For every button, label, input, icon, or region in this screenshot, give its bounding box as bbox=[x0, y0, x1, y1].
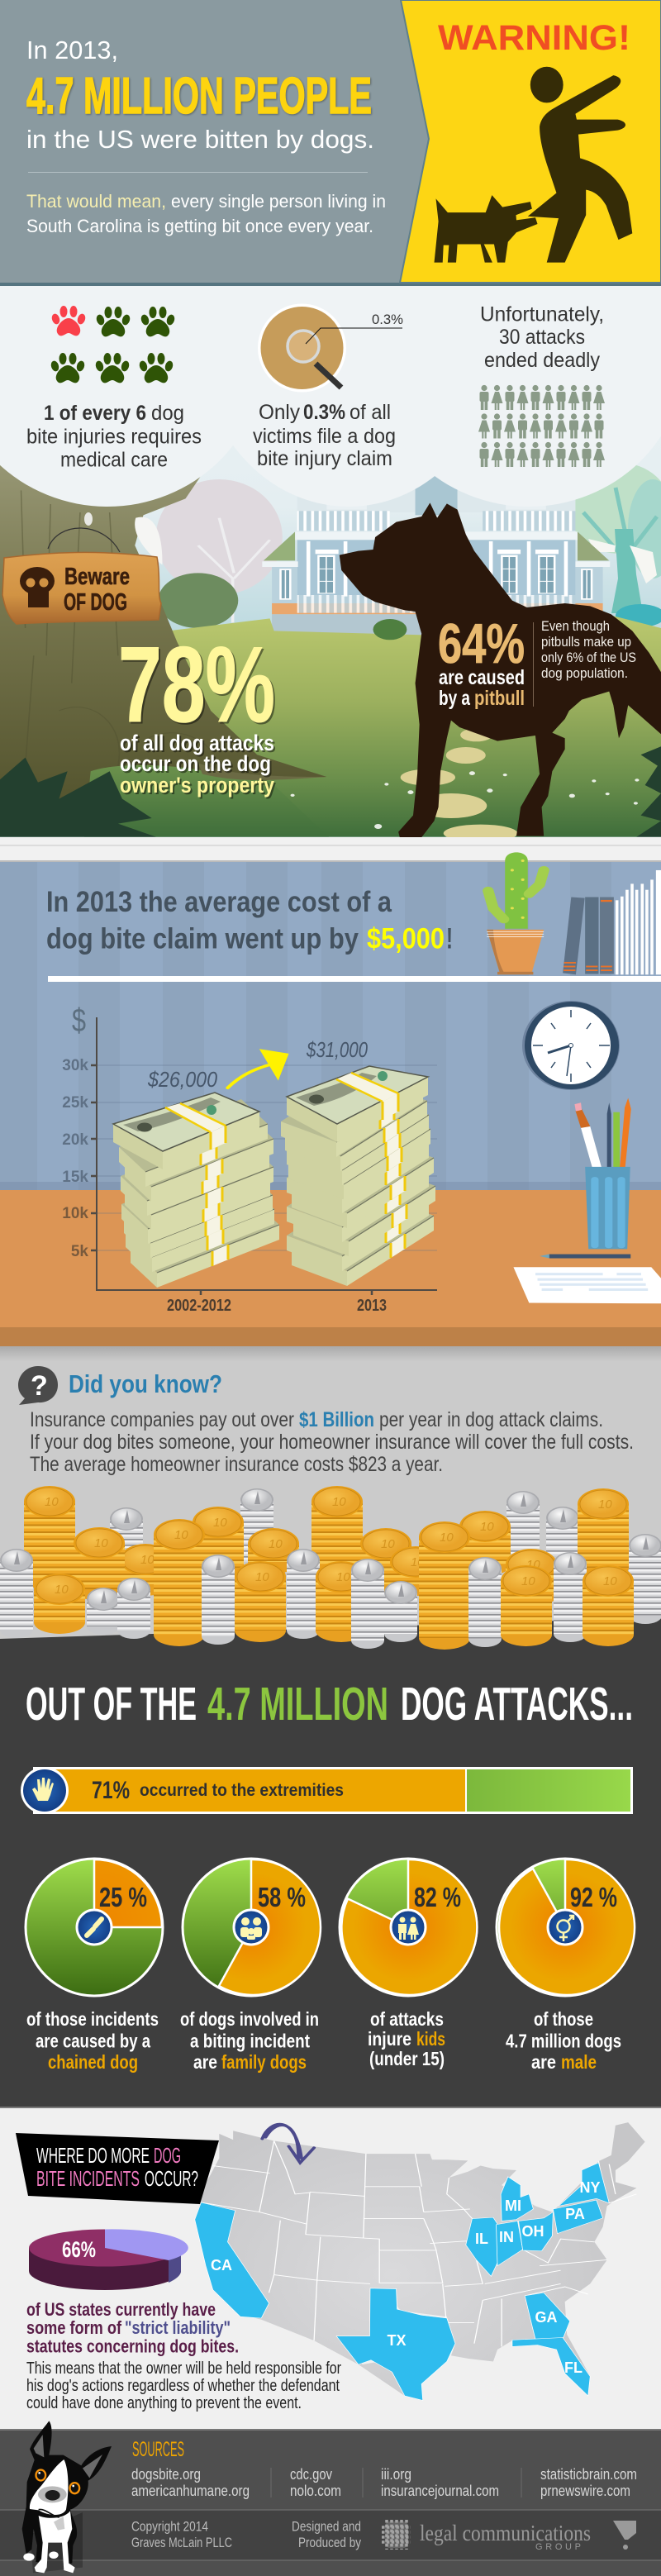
icon: coin stacks bbox=[0, 1486, 661, 1650]
map state labels: IL bbox=[475, 2231, 488, 2247]
pitbull note: Even though bbox=[541, 618, 610, 634]
magnifier caption bbox=[253, 401, 396, 470]
sources heading: SOURCES bbox=[132, 2438, 184, 2461]
pie caption: are bbox=[193, 2051, 217, 2073]
statute statement bbox=[26, 2299, 239, 2357]
stat caption: of all dog attacks bbox=[120, 731, 274, 755]
pie label: 66% bbox=[62, 2237, 96, 2262]
sources list: cdc.gov bbox=[290, 2465, 333, 2483]
statute statement: statutes concerning dog bites. bbox=[26, 2336, 239, 2357]
icon: 30 people bbox=[478, 385, 605, 467]
icon: books bbox=[563, 870, 661, 974]
claim heading: $5,000 bbox=[367, 922, 445, 955]
background trees bbox=[0, 479, 283, 628]
panel: where bites occur bbox=[0, 2108, 661, 2430]
icon: chain bbox=[87, 1919, 102, 1936]
heading line one: WHERE DO MORE bbox=[36, 2143, 150, 2168]
sources list: prnewswire.com bbox=[540, 2482, 630, 2499]
pie caption: injure bbox=[368, 2028, 411, 2050]
x axis labels: 2013 bbox=[357, 1297, 387, 1315]
statute explanation bbox=[26, 2359, 341, 2412]
foreground leaves bbox=[0, 746, 661, 837]
money stack 2002-2012 bbox=[113, 1093, 279, 1288]
pie value: 82 % bbox=[414, 1882, 461, 1912]
panel: house scene bbox=[0, 446, 661, 842]
sign text line two: OF DOG bbox=[64, 589, 127, 616]
insurance paragraph: Insurance companies pay out over bbox=[30, 1408, 294, 1431]
lawn bbox=[0, 612, 661, 842]
y axis labels: 20k bbox=[62, 1131, 88, 1149]
map state labels: NY bbox=[579, 2179, 601, 2196]
pie: kids bbox=[340, 1859, 477, 2069]
map state labels: PA bbox=[565, 2206, 585, 2222]
map of US states bbox=[195, 2122, 645, 2400]
did you know heading: Did you know? bbox=[69, 1369, 222, 1398]
magnifier caption: Only bbox=[259, 401, 300, 424]
panel: did you know bbox=[0, 1346, 661, 1654]
sources list: dogsbite.org bbox=[131, 2465, 201, 2483]
logo subtitle: GROUP bbox=[535, 2542, 581, 2552]
pitbull caption: by a bbox=[439, 687, 471, 710]
value label 31000: $31,000 bbox=[306, 1037, 368, 1062]
dollar axis label: $ bbox=[72, 1002, 86, 1039]
pie caption: male bbox=[561, 2051, 597, 2073]
y axis labels: 30k bbox=[62, 1057, 88, 1074]
map state labels: IN bbox=[499, 2229, 514, 2245]
warning title: WARNING! bbox=[438, 18, 630, 58]
y axis labels: 25k bbox=[62, 1094, 88, 1112]
dark floor bbox=[0, 1617, 661, 1654]
sign text: Beware bbox=[64, 564, 130, 590]
sources list: iii.org bbox=[381, 2465, 411, 2483]
icon: hand bbox=[32, 1778, 54, 1801]
y axis labels bbox=[62, 1057, 88, 1260]
magnifier caption: of all bbox=[350, 401, 391, 424]
stat caption bbox=[120, 731, 274, 798]
subtext bbox=[26, 191, 386, 236]
pie value: 92 % bbox=[570, 1882, 617, 1912]
pie: chained dog bbox=[26, 1859, 163, 2073]
map state labels: TX bbox=[387, 2332, 407, 2349]
y axis labels: 15k bbox=[62, 1169, 88, 1186]
map state labels: OH bbox=[522, 2223, 544, 2240]
subtext: That would mean, bbox=[26, 191, 166, 212]
pie caption bbox=[506, 2008, 621, 2073]
map heading banner bbox=[16, 2133, 219, 2204]
panel: paw stat bbox=[26, 306, 202, 471]
panel: claim cost bbox=[0, 837, 661, 1346]
pie caption: kids bbox=[416, 2028, 445, 2050]
icon: legal communications logo grid bbox=[382, 2520, 411, 2550]
headline: in 2013: In 2013, bbox=[26, 36, 118, 64]
icon: punctuation mark logo bbox=[613, 2521, 636, 2550]
insurance paragraph: per year in dog attack claims. bbox=[379, 1408, 603, 1431]
headline: 4.7 million people: 4.7 MILLION PEOPLE bbox=[26, 68, 372, 125]
headline: bitten by dogs: in the US were bitten by dogs. bbox=[26, 125, 374, 154]
icon: children bbox=[398, 1917, 419, 1940]
pie caption: family dogs bbox=[221, 2051, 307, 2073]
icon: pencil cup bbox=[540, 1098, 631, 1259]
producer credit: Produced by bbox=[298, 2535, 361, 2550]
panel: magnifier stat bbox=[253, 304, 403, 470]
icon: pitbull silhouette bbox=[340, 502, 661, 840]
insurance paragraph: The average homeowner insurance costs $823 a year. bbox=[30, 1453, 443, 1476]
statute statement: "strict liability" bbox=[125, 2317, 231, 2338]
icon: clock bbox=[522, 1001, 620, 1090]
deadly caption: ended deadly bbox=[484, 349, 600, 372]
top bill bundle bbox=[287, 1066, 428, 1142]
bar: 71 percent extremities bbox=[21, 1767, 633, 1814]
stat: 78 percent bbox=[118, 624, 275, 798]
pie caption: chained dog bbox=[48, 2051, 138, 2073]
deadly caption bbox=[480, 302, 604, 372]
paw caption: dog bbox=[151, 402, 184, 425]
pie caption bbox=[180, 2008, 319, 2073]
bar chart axes bbox=[62, 1002, 437, 1315]
money stack 2013 bbox=[281, 1066, 435, 1286]
sources list: statisticbrain.com bbox=[540, 2465, 637, 2483]
icon: gender bbox=[557, 1916, 573, 1941]
pie caption: of those incidents bbox=[26, 2008, 159, 2030]
section background bbox=[0, 286, 661, 837]
stat caption: owner's property bbox=[120, 773, 274, 798]
icon: person and biting dog bbox=[435, 67, 632, 263]
x axis labels: 2002-2012 bbox=[167, 1297, 231, 1315]
statute statement: some form of bbox=[26, 2317, 122, 2338]
pitbull note: pitbulls make up bbox=[541, 634, 631, 650]
tree trunk bbox=[0, 449, 329, 837]
pitbull caption: are caused bbox=[439, 666, 525, 689]
map state labels bbox=[211, 2179, 601, 2376]
pie caption: of dogs involved in bbox=[180, 2008, 319, 2030]
icon: paper note bbox=[513, 1267, 661, 1303]
statute statement: of US states currently have bbox=[26, 2299, 216, 2320]
pie caption: are bbox=[531, 2051, 556, 2073]
statute explanation: could have done anything to prevent the event. bbox=[26, 2394, 302, 2412]
icon: question bubble: ? bbox=[31, 1370, 48, 1402]
icon: family bbox=[240, 1917, 262, 1940]
stat: 64 percent pitbull bbox=[438, 612, 636, 710]
bar value: 71% bbox=[92, 1777, 130, 1804]
icon: skull bbox=[20, 567, 55, 607]
pitbull caption bbox=[439, 666, 525, 710]
statute explanation: his dog's actions regardless of whether the defendant bbox=[26, 2377, 340, 2395]
value label 26000: $26,000 bbox=[147, 1067, 217, 1092]
heading line two: OCCUR? bbox=[145, 2166, 198, 2191]
arrow: cost increase bbox=[228, 1049, 288, 1088]
claim heading: In 2013 the average cost of a bbox=[46, 886, 392, 918]
deadly caption: Unfortunately, bbox=[480, 302, 604, 326]
x axis labels bbox=[167, 1297, 387, 1315]
logo wordmark: legal communications bbox=[420, 2521, 591, 2545]
icon: boston terrier bbox=[22, 2421, 112, 2573]
claim heading: ! bbox=[446, 922, 453, 955]
stat: 78 percent: 78% bbox=[118, 624, 275, 745]
house bbox=[262, 446, 610, 636]
section title bbox=[26, 1678, 633, 1731]
pie caption: 4.7 million dogs bbox=[506, 2030, 621, 2051]
magnifier caption: 0.3% bbox=[303, 401, 345, 424]
pie caption: of those bbox=[534, 2008, 593, 2030]
stat: 64 percent pitbull: 64% bbox=[438, 612, 525, 675]
heading line one: DOG bbox=[154, 2143, 181, 2168]
icon: question bubble bbox=[18, 1366, 58, 1405]
sources list: americanhumane.org bbox=[131, 2482, 250, 2499]
map state labels: GA bbox=[535, 2309, 558, 2326]
panel: deadly attacks bbox=[478, 302, 605, 467]
sources list: nolo.com bbox=[290, 2482, 341, 2499]
magnifier caption: bite injury claim bbox=[257, 447, 392, 470]
pie caption: are caused by a bbox=[36, 2030, 150, 2051]
map state labels: FL bbox=[564, 2359, 583, 2376]
pie: family dogs bbox=[180, 1859, 321, 2073]
statute explanation: This means that the owner will be held responsible for bbox=[26, 2359, 341, 2378]
pie caption: (under 15) bbox=[369, 2048, 445, 2069]
y axis labels: 10k bbox=[62, 1205, 88, 1222]
section title: OUT OF THE bbox=[26, 1678, 197, 1731]
right tree bbox=[568, 463, 661, 627]
beware of dog sign bbox=[2, 512, 161, 624]
top bill bundle bbox=[113, 1093, 259, 1169]
pie caption bbox=[368, 2008, 445, 2069]
claim heading bbox=[46, 886, 453, 955]
shelf bbox=[48, 976, 661, 982]
deadly caption: 30 attacks bbox=[499, 326, 585, 349]
subtext: South Carolina is getting bit once every year. bbox=[26, 216, 373, 236]
bar label: occurred to the extremities bbox=[140, 1781, 344, 1800]
panel: attack statistics bbox=[0, 1653, 661, 2108]
3d pie: strict liability bbox=[29, 2229, 188, 2290]
pitbull note: dog population. bbox=[541, 665, 628, 681]
insurance paragraph: $1 Billion bbox=[299, 1408, 374, 1431]
paw caption bbox=[26, 402, 202, 471]
copyright: Copyright 2014 bbox=[131, 2519, 208, 2534]
stat caption: occur on the dog bbox=[120, 751, 271, 776]
paw caption: bite injuries requires bbox=[26, 425, 202, 448]
magnifier caption: victims file a dog bbox=[253, 425, 396, 448]
pie caption: a biting incident bbox=[190, 2030, 310, 2051]
map state labels: CA bbox=[211, 2257, 232, 2274]
heading line two: BITE INCIDENTS bbox=[36, 2166, 140, 2191]
pie caption: of attacks bbox=[370, 2008, 444, 2030]
producer credit bbox=[292, 2519, 361, 2550]
paw caption: medical care bbox=[60, 448, 168, 471]
producer credit: Designed and bbox=[292, 2519, 361, 2534]
icon: magnifier on circle bbox=[258, 304, 402, 392]
pie value: 58 % bbox=[258, 1882, 306, 1912]
icon: cactus bbox=[487, 852, 544, 974]
insurance paragraph bbox=[30, 1408, 634, 1476]
sources list: insurancejournal.com bbox=[381, 2482, 499, 2499]
pitbull note: only 6% of the US bbox=[541, 650, 636, 665]
pitbull caption: pitbull bbox=[474, 687, 525, 710]
panel: header bbox=[0, 0, 661, 286]
pie caption bbox=[26, 2008, 159, 2073]
pie: male bbox=[497, 1859, 635, 2073]
copyright bbox=[131, 2519, 232, 2550]
claim heading: dog bite claim went up by bbox=[46, 922, 359, 955]
sources list bbox=[131, 2465, 637, 2499]
arrow: over map bbox=[262, 2124, 314, 2163]
warning panel bbox=[400, 0, 661, 283]
info scallops bbox=[0, 441, 656, 507]
pitbull note bbox=[541, 618, 636, 681]
subtext: every single person living in bbox=[171, 191, 386, 212]
copyright: Graves McLain PLLC bbox=[131, 2535, 232, 2550]
panel: footer bbox=[0, 2421, 661, 2576]
magnifier label: 0.3% bbox=[372, 312, 403, 327]
y axis labels: 5k bbox=[71, 1243, 88, 1260]
paw caption: 1 of every 6 bbox=[44, 402, 146, 425]
icon: paws bbox=[50, 306, 176, 383]
section title: 4.7 MILLION bbox=[207, 1678, 388, 1731]
map state labels: MI bbox=[505, 2197, 521, 2214]
pie value: 25 % bbox=[99, 1882, 147, 1912]
